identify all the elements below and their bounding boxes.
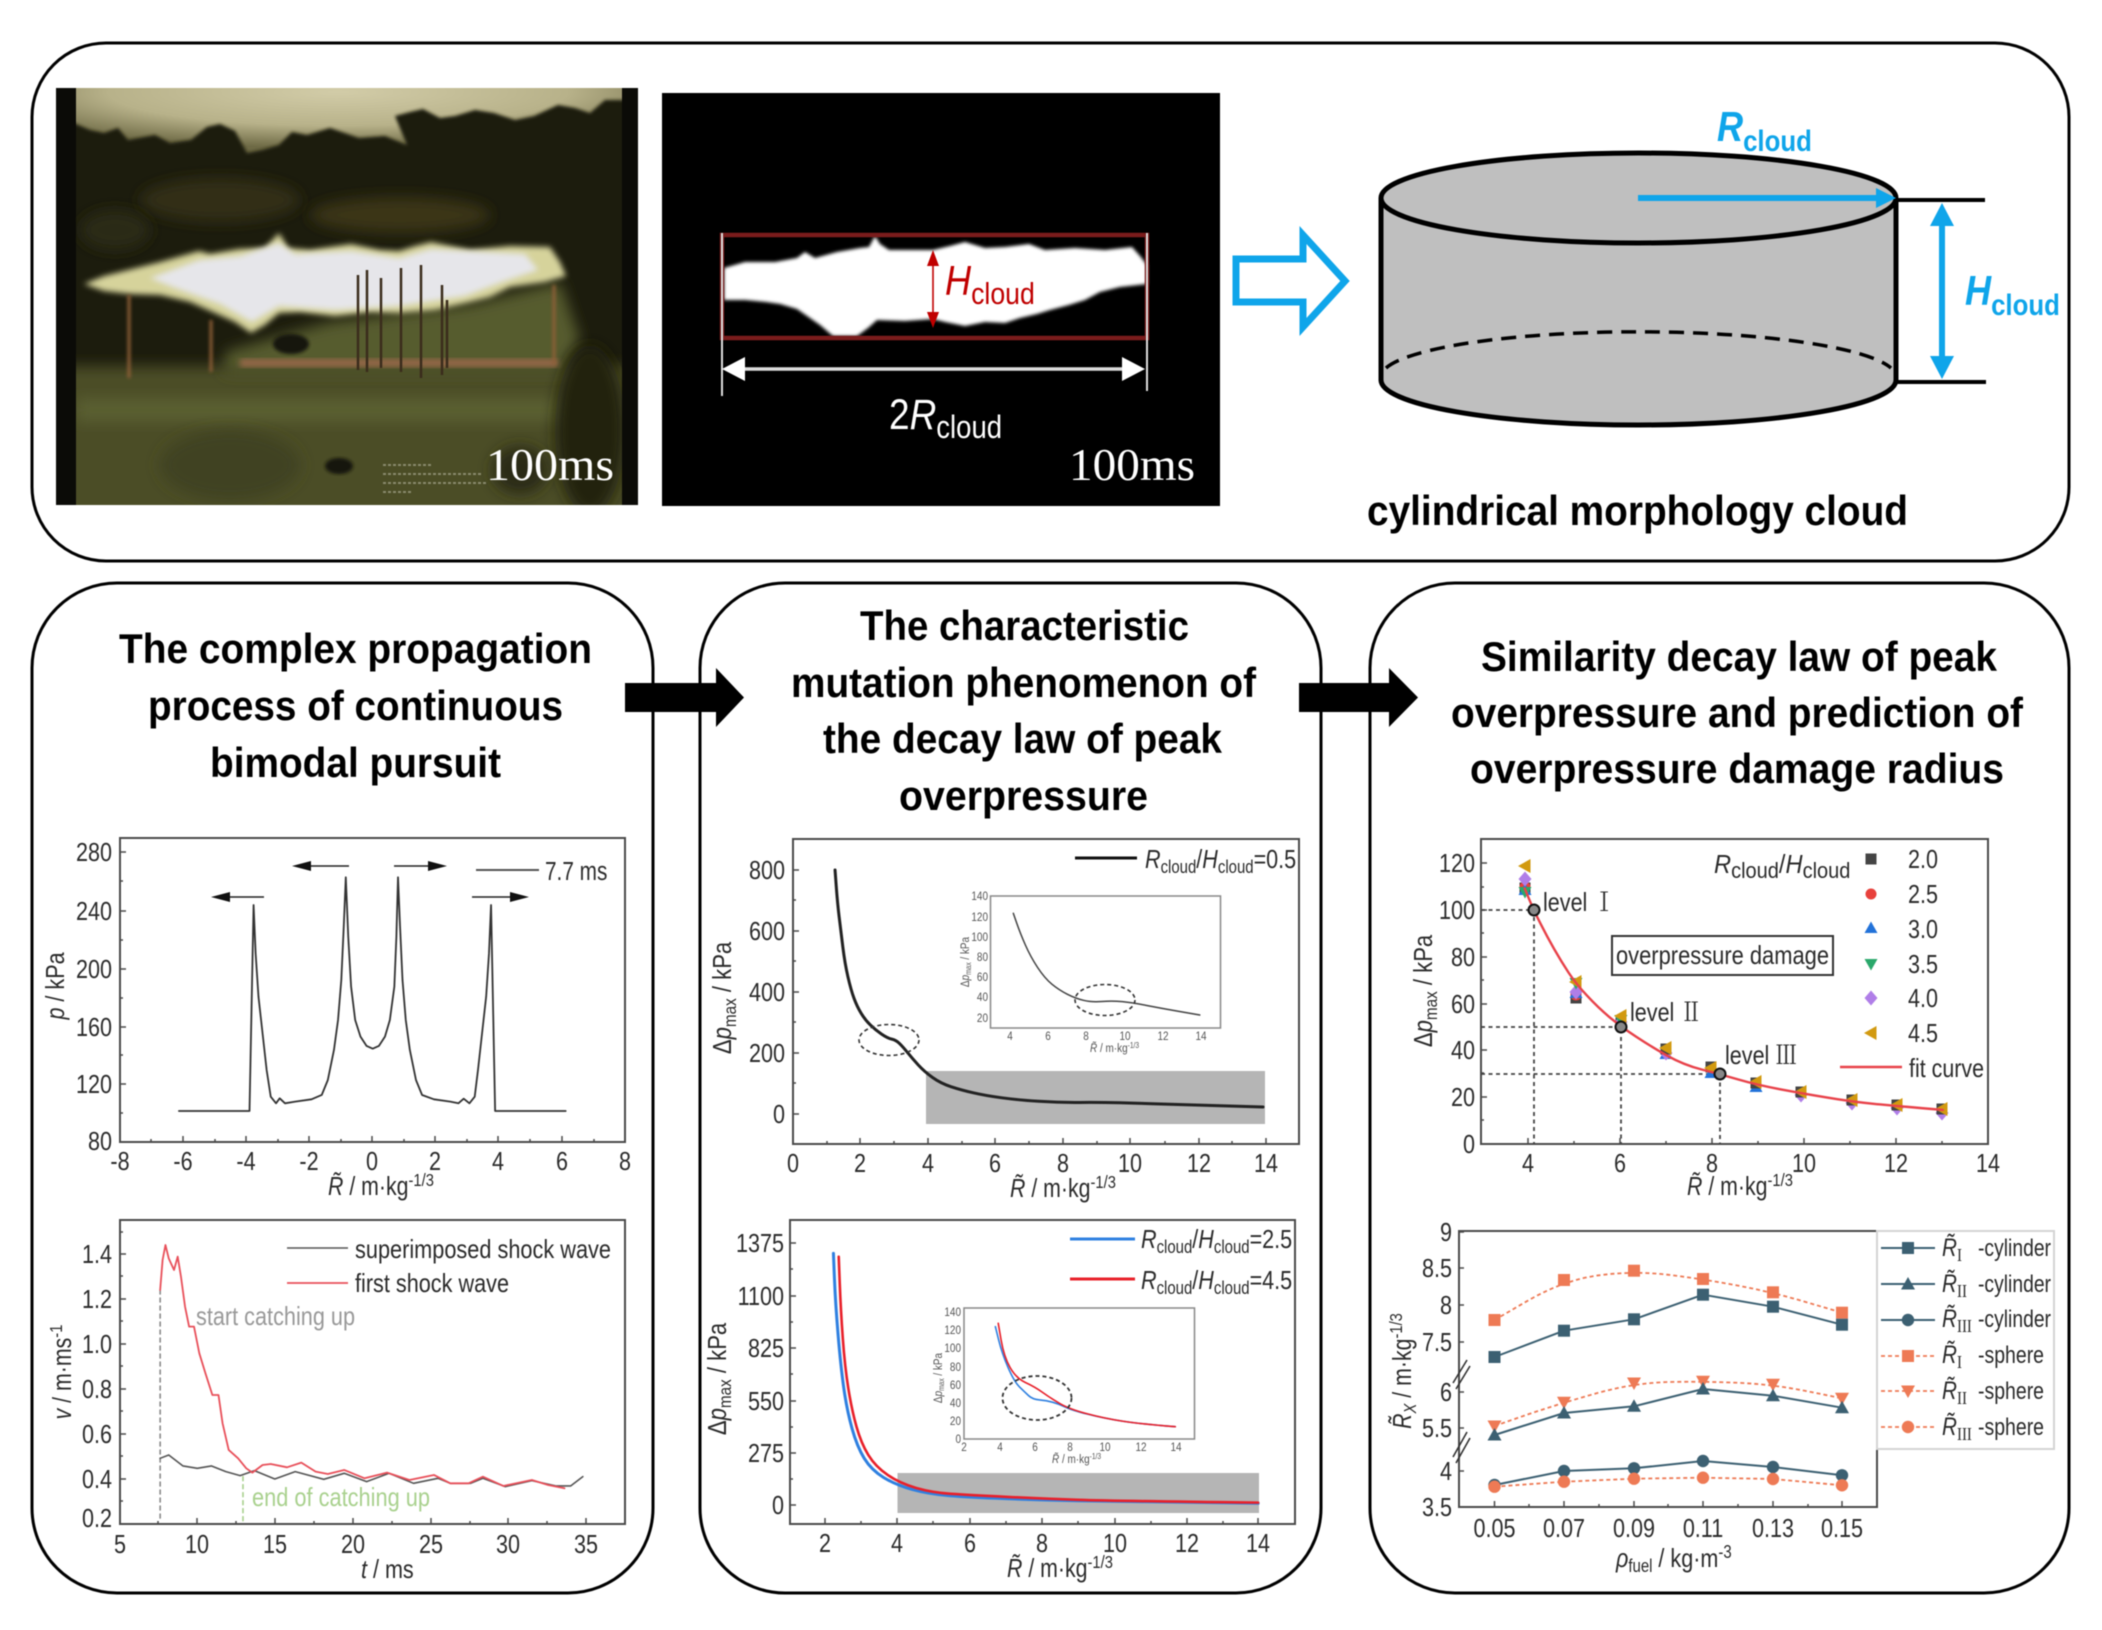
chart: shock wave velocity vs time: 1.2 [82,1285,112,1315]
chart: fit curve with damage levels: 2.0 [1908,845,1938,875]
legend: -sphere [1978,1414,2044,1441]
chart: shock wave velocity vs time: 20 [341,1530,365,1560]
chart: decay curve ratio 0.5: cloud [1218,857,1254,877]
chart: decay curve ratio 0.5: 12 [1187,1149,1211,1179]
chart: shock wave velocity vs time: 0.6 [82,1420,112,1450]
chart: pressure vs scaled distance: 200 [76,955,112,985]
chart: decay curve ratio 0.5: 8 [1057,1149,1069,1179]
inset chart: 100 [944,1342,961,1355]
legend: R̃ [1942,1233,1957,1261]
chart: shock wave velocity vs time: 0.4 [82,1465,112,1495]
chart: pressure vs scaled distance: 240 [76,897,112,927]
chart: fit curve with damage levels: 20 [1451,1083,1475,1113]
chart: decay curve ratio 0.5: R̃ / m·kg [1010,1174,1091,1204]
legend: II [1957,1388,1967,1408]
chart: decay curves ratio 2.5 and 4.5: cloud [1214,1278,1250,1298]
heading: Similarity decay law of peak [1481,633,1998,680]
chart: fit curve with damage levels: 3.0 [1908,915,1938,945]
heading: The complex propagation [119,625,592,672]
chart: pressure vs scaled distance: -8 [110,1147,130,1177]
chart: pressure vs scaled distance: 6 [556,1147,568,1177]
inset chart: 6 [1045,1030,1051,1043]
chart: fit curve with damage levels: H [1785,851,1803,879]
chart: pressure vs scaled distance: 160 [76,1013,112,1043]
chart: fit curve with damage levels: 100 [1439,896,1475,926]
chart: fit curve with damage levels: fit curve [1909,1053,1984,1083]
chart: fit curve with damage levels: 80 [1451,943,1475,973]
inset chart: 4 [1007,1030,1013,1043]
inset chart: 40 [977,991,988,1004]
inset chart: 6 [1032,1441,1038,1454]
chart: decay curves ratio 2.5 and 4.5: =4.5 [1250,1266,1292,1296]
label: H cloud: H [945,259,972,305]
legend: -sphere [1978,1342,2044,1369]
chart: damage radius vs fuel density: 7.5 [1422,1328,1452,1358]
chart: decay curves ratio 2.5 and 4.5: cloud [1157,1237,1192,1257]
chart: damage radius vs fuel density: 8.5 [1422,1254,1452,1284]
chart: shock wave velocity vs time: 0.2 [82,1504,112,1534]
timestamp: 100ms [1069,439,1195,490]
inset chart [932,1306,1194,1466]
chart: damage radius vs fuel density: -1/3 [1387,1313,1406,1339]
chart: shock wave velocity vs time: 0.8 [82,1375,112,1405]
chart: decay curve ratio 0.5: Δp [708,1027,737,1054]
chart: decay curves ratio 2.5 and 4.5: 14 [1246,1529,1270,1559]
chart: decay curve ratio 0.5: -1/3 [1091,1173,1116,1192]
arrow: cloud height [927,250,939,328]
chart: decay curves ratio 2.5 and 4.5: Δp [703,1408,732,1435]
label: R cloud: R [1717,105,1744,151]
chart: decay curves ratio 2.5 and 4.5: R̃ / m·kg [1007,1554,1088,1584]
chart: damage radius vs fuel density: 4 [1440,1457,1452,1487]
chart: shock wave velocity vs time: start catching up [196,1301,355,1331]
legend: R̃ [1942,1340,1957,1368]
panel: mutation phenomenon [700,583,1321,1593]
chart: decay curves ratio 2.5 and 4.5: 825 [748,1334,784,1364]
legend: I [1957,1352,1962,1372]
label: 2R cloud: 2R [889,391,936,439]
chart: shock wave velocity vs time: 5 [114,1530,126,1560]
chart: damage radius vs fuel density: 3.5 [1422,1493,1452,1523]
chart: damage radius vs fuel density: ρ [1615,1544,1628,1574]
chart: damage radius vs fuel density: 8 [1440,1291,1452,1321]
arrow: hollow blue arrow to cylinder [1236,235,1345,327]
chart: decay curve ratio 0.5 [708,839,1299,1204]
chart: damage radius vs fuel density: fuel [1628,1556,1652,1576]
chart: fit curve with damage levels [1409,839,2000,1202]
chart: shock wave velocity vs time: 1.4 [82,1240,112,1270]
label: H cloud blue: cloud [1991,288,2060,321]
heading: overpressure and prediction of [1451,689,2024,736]
heading: bimodal pursuit [210,739,501,786]
chart: pressure vs scaled distance: 7.7 ms [545,857,607,886]
chart: damage radius vs fuel density: 5.5 [1422,1414,1452,1444]
chart: fit curve with damage levels: level Ⅲ [1725,1041,1797,1071]
chart: damage radius vs fuel density: 0.13 [1752,1514,1794,1544]
inset chart: Δp [959,975,972,987]
chart: decay curves ratio 2.5 and 4.5: cloud [1214,1237,1250,1257]
chart: fit curve with damage levels: 6 [1614,1149,1626,1179]
chart: damage radius vs fuel density: 0.09 [1613,1514,1655,1544]
chart: damage radius vs fuel density: 6 [1440,1378,1452,1408]
chart: decay curves ratio 2.5 and 4.5: 8 [1036,1529,1048,1559]
chart: fit curve with damage levels: 8 [1706,1149,1718,1179]
chart: decay curve ratio 0.5: 0 [773,1100,785,1130]
inset chart: 14 [1195,1030,1207,1043]
chart: decay curves ratio 2.5 and 4.5: max [715,1379,735,1408]
chart: decay curves ratio 2.5 and 4.5: 6 [964,1529,976,1559]
panel: propagation process [32,583,653,1593]
chart: decay curves ratio 2.5 and 4.5: 275 [748,1439,784,1469]
chart: pressure vs scaled distance: 80 [88,1127,112,1157]
legend: -cylinder [1978,1306,2051,1333]
inset chart: max [963,962,973,975]
chart: decay curves ratio 2.5 and 4.5: R [1141,1266,1157,1296]
chart: fit curve with damage levels: cloud [1803,859,1850,883]
inset chart: R̃ / m·kg [1052,1453,1090,1466]
chart: shock wave velocity vs time: 15 [263,1530,287,1560]
chart: decay curve ratio 0.5: cloud [1161,857,1196,877]
chart: damage radius vs fuel density [1387,1218,2054,1576]
legend: II [1957,1281,1967,1301]
chart: decay curve ratio 0.5: / [1196,845,1203,875]
scatter markers [1518,859,1948,1120]
chart: decay curve ratio 0.5: H [1202,845,1219,875]
legend: R̃ [1942,1412,1957,1440]
heading [1451,633,2024,792]
chart: shock wave velocity vs time: t / ms [361,1555,414,1585]
legend: -sphere [1978,1378,2044,1405]
inset chart: 80 [950,1361,961,1374]
chart: shock wave velocity vs time: 30 [496,1530,520,1560]
chart: decay curve ratio 0.5: 4 [922,1149,934,1179]
chart: decay curves ratio 2.5 and 4.5: R [1141,1225,1157,1255]
chart: decay curves ratio 2.5 and 4.5: H [1198,1266,1215,1296]
chart: damage radius vs fuel density: / kg·m [1652,1544,1718,1574]
image: binarised cloud silhouette at 100ms [662,93,1220,506]
inset chart: 20 [950,1415,961,1428]
inset chart: 14 [1170,1441,1182,1454]
chart: fit curve with damage levels: 4 [1522,1149,1534,1179]
inset chart: Δp [932,1391,945,1403]
inset chart: -1/3 [1090,1451,1101,1461]
chart: damage radius vs fuel density: / m·kg [1388,1339,1418,1404]
chart: decay curves ratio 2.5 and 4.5: cloud [1157,1278,1192,1298]
chart: decay curves ratio 2.5 and 4.5: / kPa [703,1322,732,1379]
label: R cloud: cloud [1743,124,1812,157]
chart: decay curves ratio 2.5 and 4.5: / [1192,1225,1199,1255]
heading: process of continuous [148,682,563,729]
chart: fit curve with damage levels: 0 [1463,1130,1475,1160]
legend: III [1957,1316,1972,1336]
chart: decay curve ratio 0.5: max [720,998,740,1027]
chart: fit curve with damage levels: 120 [1439,849,1475,879]
chart: pressure vs scaled distance: R̃ / m·kg [328,1172,409,1202]
chart: pressure vs scaled distance: 120 [76,1070,112,1100]
diagram: gray cylinder [1381,153,1986,425]
inset chart: 2 [961,1441,967,1454]
chart: fit curve with damage levels: level Ⅱ [1630,998,1702,1028]
chart: damage radius vs fuel density: 0.15 [1821,1514,1863,1544]
chart: fit curve with damage levels: / [1779,851,1786,879]
caption: cylindrical morphology cloud [1367,487,1908,534]
chart: decay curve ratio 0.5: / kPa [708,941,737,998]
chart: damage radius vs fuel density: 0.07 [1543,1514,1585,1544]
chart: decay curves ratio 2.5 and 4.5: -1/3 [1088,1553,1113,1572]
chart: fit curve with damage levels: R̃ / m·kg [1687,1172,1768,1202]
chart: shock wave velocity vs time: end of catching up [252,1482,430,1512]
chart: shock wave velocity vs time: 1.0 [82,1330,112,1360]
chart: shock wave velocity vs time: 10 [185,1530,209,1560]
chart: decay curves ratio 2.5 and 4.5: 2 [819,1529,831,1559]
inset chart: 20 [977,1012,988,1025]
chart: decay curve ratio 0.5: 600 [749,917,785,947]
heading: the decay law of peak [823,715,1223,762]
heading: mutation phenomenon of [791,659,1257,706]
chart: pressure vs scaled distance: 0 [366,1147,378,1177]
chart: fit curve with damage levels: 14 [1976,1149,2000,1179]
chart: decay curves ratio 2.5 and 4.5: 10 [1103,1529,1127,1559]
legend: -cylinder [1978,1235,2051,1262]
chart: decay curve ratio 0.5: 0 [787,1149,799,1179]
chart: fit curve with damage levels: overpressure damage [1616,940,1829,970]
photo: explosion fireball at 100ms: 100ms [486,439,614,490]
chart: shock wave velocity vs time: 35 [574,1530,598,1560]
chart: shock wave velocity vs time: -1 [47,1325,66,1338]
chart: fit curve with damage levels: 40 [1451,1036,1475,1066]
chart: decay curve ratio 0.5: 800 [749,856,785,886]
legend: -cylinder [1978,1271,2051,1298]
chart: fit curve with damage levels: -1/3 [1768,1171,1793,1190]
chart: decay curves ratio 2.5 and 4.5: / [1192,1266,1199,1296]
chart: decay curves ratio 2.5 and 4.5: =2.5 [1250,1225,1292,1255]
chart: fit curve with damage levels: 4.0 [1908,984,1938,1014]
chart: pressure vs scaled distance: p / kPa [41,952,71,1020]
heading: overpressure damage radius [1470,745,2004,792]
inset chart: 10 [1099,1441,1111,1454]
chart: damage radius vs fuel density: 0.05 [1474,1514,1515,1544]
inset chart: 140 [944,1306,961,1319]
inset chart [959,890,1220,1055]
chart: decay curves ratio 2.5 and 4.5: H [1198,1225,1215,1255]
chart: decay curve ratio 0.5: 6 [989,1149,1001,1179]
inset chart: 8 [1067,1441,1073,1454]
arrow: panel two to panel three [1299,668,1418,727]
inset chart: 60 [950,1379,961,1392]
chart: decay curve ratio 0.5: =0.5 [1254,845,1296,875]
chart: decay curve ratio 0.5: 2 [854,1149,866,1179]
chart: pressure vs scaled distance: -1/3 [409,1171,434,1190]
chart: damage radius vs fuel density: 0.11 [1683,1514,1723,1544]
chart: decay curve ratio 0.5: 400 [749,978,785,1008]
chart: pressure vs scaled distance: -6 [173,1147,193,1177]
chart: decay curves ratio 2.5 and 4.5: 4 [891,1529,903,1559]
chart: decay curves ratio 2.5 and 4.5: 1100 [738,1282,784,1312]
inset chart: 8 [1083,1030,1089,1043]
legend: R̃ [1942,1269,1957,1297]
chart: pressure vs scaled distance: -2 [299,1147,319,1177]
chart: fit curve with damage levels: level Ⅰ [1543,888,1615,918]
legend [1877,1231,2054,1449]
panel: cylindrical morphology cloud [32,43,2069,561]
chart: shock wave velocity vs time: superimposed shock wave [355,1234,611,1264]
legend: III [1957,1424,1972,1444]
photo: explosion fireball at 100ms [55,87,639,506]
chart: pressure vs scaled distance: 4 [492,1147,504,1177]
chart: pressure vs scaled distance: 280 [76,838,112,868]
chart: shock wave velocity vs time [47,1220,625,1585]
chart: fit curve with damage levels: cloud [1731,859,1779,883]
arrow: panel one to panel two [625,668,744,727]
chart: damage radius vs fuel density: -3 [1718,1542,1732,1562]
inset chart: 140 [971,890,988,903]
chart: decay curve ratio 0.5: 14 [1254,1149,1278,1179]
chart: pressure vs scaled distance: 8 [619,1147,631,1177]
heading: overpressure [899,772,1148,819]
arrow: cloud diameter [722,357,1145,381]
chart: shock wave velocity vs time: 25 [419,1530,443,1560]
chart: decay curves ratio 2.5 and 4.5: 1375 [736,1229,784,1259]
inset chart: 100 [971,931,988,944]
data markers [1488,1265,1849,1493]
chart: fit curve with damage levels: 4.5 [1908,1019,1938,1049]
inset chart: 10 [1119,1030,1131,1043]
inset chart: -1/3 [1128,1040,1139,1050]
chart: decay curves ratio 2.5 and 4.5: 550 [748,1387,784,1417]
arrow: radius [1638,188,1896,208]
inset chart: 80 [977,951,988,964]
chart: fit curve with damage levels: 60 [1451,990,1475,1020]
legend: I [1957,1245,1962,1265]
panel: similarity decay law [1370,583,2069,1593]
chart: fit curve with damage levels: 2.5 [1908,880,1938,910]
inset chart: 120 [971,911,988,924]
inset chart: 4 [997,1441,1003,1454]
chart: fit curve with damage levels: 10 [1792,1149,1816,1179]
legend: R̃ [1942,1376,1957,1404]
chart: damage radius vs fuel density: X [1401,1403,1420,1414]
inset chart: 0 [955,1433,961,1446]
chart: damage radius vs fuel density: R̃ [1388,1413,1418,1429]
chart: decay curves ratio 2.5 and 4.5: 12 [1175,1529,1199,1559]
inset chart: / kPa [932,1352,945,1378]
chart: decay curve ratio 0.5: R [1145,845,1161,875]
chart: decay curve ratio 0.5: 10 [1118,1149,1142,1179]
inset chart: 12 [1135,1441,1147,1454]
chart: fit curve with damage levels: Δp [1409,1020,1438,1047]
inset chart: 40 [950,1397,961,1410]
label: H cloud: cloud [971,277,1035,312]
chart: fit curve with damage levels: 12 [1884,1149,1908,1179]
chart: fit curve with damage levels: R [1714,851,1731,879]
chart: decay curve ratio 0.5: 200 [749,1039,785,1069]
inset chart: 12 [1157,1030,1169,1043]
inset chart: / kPa [959,936,972,962]
heading [119,625,592,786]
chart: decay curves ratio 2.5 and 4.5 [703,1220,1295,1584]
chart: shock wave velocity vs time: first shock wave [355,1268,509,1298]
heading: The characteristic [860,602,1189,649]
inset chart: 120 [944,1324,961,1337]
chart: pressure vs scaled distance [41,838,631,1202]
inset chart: 60 [977,971,988,984]
chart: fit curve with damage levels: 3.5 [1908,950,1938,980]
label: 2R cloud: cloud [936,410,1002,446]
chart: damage radius vs fuel density: 9 [1440,1218,1452,1248]
legend: R̃ [1942,1304,1957,1332]
inset chart: max [936,1378,946,1391]
label: H cloud blue: H [1965,269,1992,315]
arrow: height [1930,203,1954,379]
chart: shock wave velocity vs time: v / m·ms [48,1338,78,1419]
inset chart: R̃ / m·kg [1090,1042,1128,1055]
chart: fit curve with damage levels: max [1421,991,1441,1020]
heading [791,602,1257,819]
chart: pressure vs scaled distance: 2 [429,1147,441,1177]
chart: decay curves ratio 2.5 and 4.5: 0 [772,1491,784,1521]
chart: fit curve with damage levels: / kPa [1409,934,1438,991]
chart: pressure vs scaled distance: -4 [236,1147,256,1177]
